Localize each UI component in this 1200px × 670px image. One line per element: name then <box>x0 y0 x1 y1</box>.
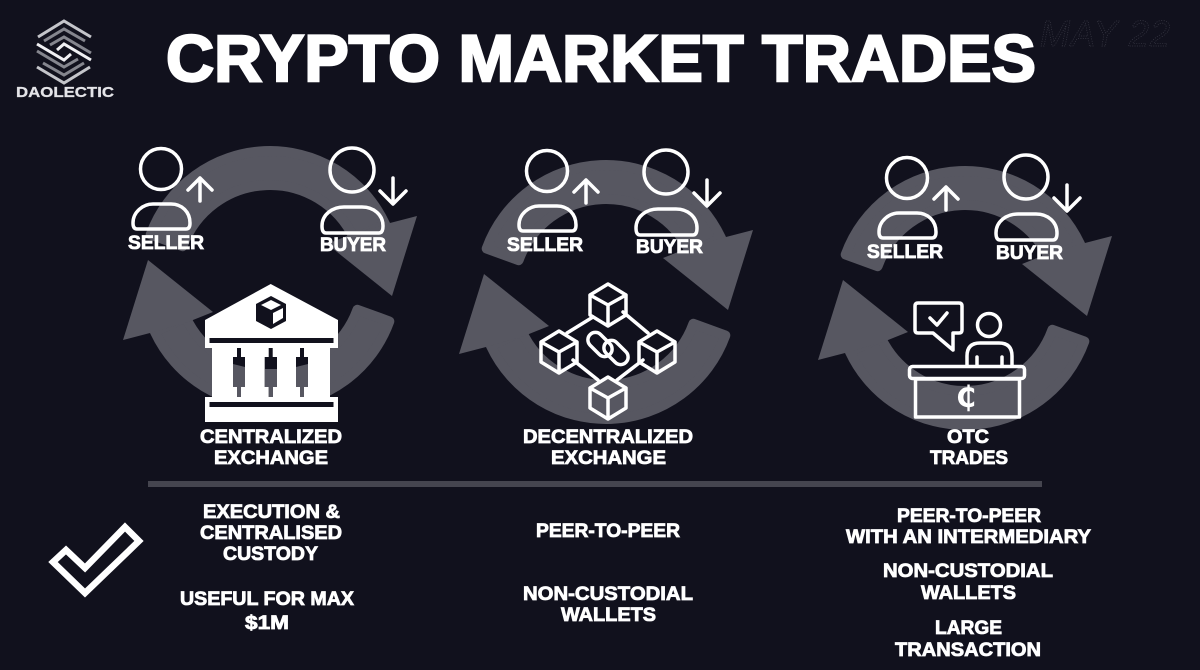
OTC trades label <box>930 426 1008 469</box>
buyer label: BUYER <box>320 234 386 256</box>
centralized exchange label <box>200 426 342 469</box>
title: CRYPTO MARKET TRADES <box>166 21 1036 95</box>
decentralized exchange label: EXCHANGE <box>551 447 666 469</box>
text block: centralized exchange features: USEFUL FOR MAX <box>180 588 354 610</box>
text block: OTC trade features: TRANSACTION <box>895 639 1041 661</box>
cycle arrows <box>123 151 417 405</box>
seller label: SELLER <box>507 234 583 256</box>
text block: centralized exchange features <box>180 501 354 634</box>
text block: decentralized exchange features <box>523 520 693 626</box>
icon: check mark <box>53 527 139 593</box>
buyer label: BUYER <box>996 242 1063 264</box>
seller icon <box>879 158 958 238</box>
text block: OTC trade features: WALLETS <box>921 582 1016 604</box>
icon: hexagon logo mark <box>37 21 91 83</box>
buyer icon <box>636 150 720 235</box>
seller label: SELLER <box>867 241 943 263</box>
text block: centralized exchange features: CUSTODY <box>223 543 318 565</box>
icon: bank with candlesticks <box>205 284 338 422</box>
text block: centralized exchange features: $1M <box>245 612 289 634</box>
OTC trades label: OTC <box>947 426 989 448</box>
buyer icon <box>322 148 406 233</box>
text block: decentralized exchange features: NON-CUSTODIAL <box>523 583 693 605</box>
decentralized exchange label <box>523 426 693 469</box>
icon: OTC desk with agent <box>910 303 1024 417</box>
icon: OTC desk with agent: ₵ <box>956 380 976 414</box>
centralized exchange label: EXCHANGE <box>214 447 328 469</box>
centralized exchange label: CENTRALIZED <box>200 426 342 448</box>
logo: Daolectic <box>16 21 114 101</box>
seller icon <box>133 148 212 229</box>
cycle arrows <box>818 171 1112 425</box>
text block: decentralized exchange features: PEER-TO-PEER <box>536 520 680 542</box>
text block: OTC trade features: PEER-TO-PEER <box>897 505 1041 527</box>
buyer label: BUYER <box>636 236 703 258</box>
cycle arrows <box>459 165 753 419</box>
icon: blockchain network <box>541 284 675 419</box>
logo wordmark: DAOLECTIC <box>16 84 114 101</box>
text block: centralized exchange features: CENTRALISED <box>200 522 342 544</box>
text block: decentralized exchange features: WALLETS <box>561 604 656 626</box>
divider <box>148 481 1042 487</box>
buyer icon <box>996 155 1080 240</box>
seller icon <box>519 150 598 231</box>
panel: OTC trades <box>818 155 1112 469</box>
text block: OTC trade features <box>846 505 1091 661</box>
seller label: SELLER <box>128 232 204 254</box>
text block: centralized exchange features: EXECUTION & <box>203 501 340 523</box>
text block: OTC trade features: WITH AN INTERMEDIARY <box>846 526 1091 548</box>
decentralized exchange label: DECENTRALIZED <box>523 426 693 448</box>
text block: OTC trade features: NON-CUSTODIAL <box>883 560 1053 582</box>
panel: decentralized exchange <box>459 150 753 469</box>
panel: centralized exchange <box>123 148 417 469</box>
date stamp: MAY 22 <box>1040 13 1170 54</box>
OTC trades label: TRADES <box>930 447 1008 469</box>
text block: OTC trade features: LARGE <box>935 617 1002 639</box>
